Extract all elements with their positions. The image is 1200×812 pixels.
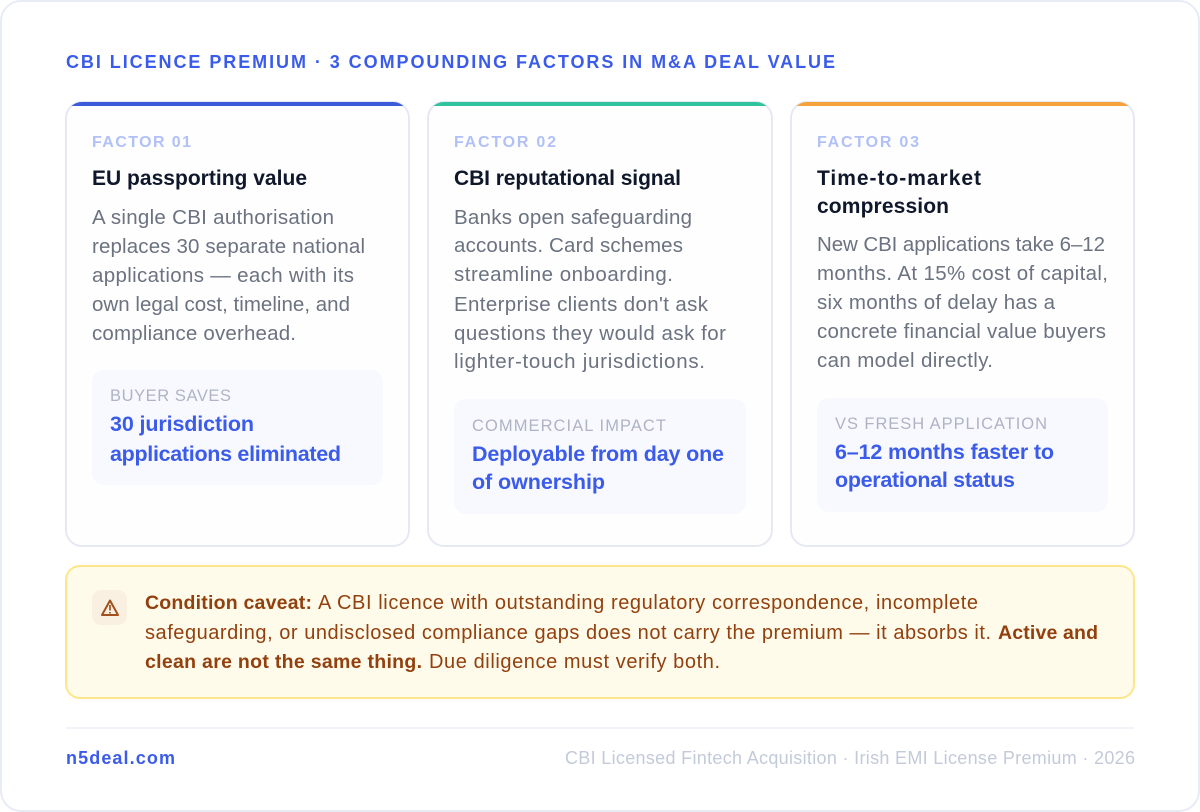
caveat text: clean are not the same thing. [145, 651, 422, 673]
callout: commercial impact: of ownership [472, 470, 605, 494]
callout: buyer saves: BUYER SAVES [110, 387, 231, 405]
factor label 02: FACTOR 02 [454, 134, 556, 151]
body text 03: concrete financial value buyers [817, 320, 1106, 343]
body text 03 [817, 233, 1108, 372]
body text 01: A single CBI authorisation [92, 206, 334, 229]
body text 03: New CBI applications take 6–12 [817, 233, 1105, 256]
body text 02: Enterprise clients don't ask [454, 293, 709, 316]
body text 02: Banks open safeguarding [454, 206, 692, 229]
factor label 01: FACTOR 01 [92, 134, 191, 151]
callout: vs fresh application: VS FRESH APPLICATION [835, 415, 1047, 433]
factor label 03: FACTOR 03 [817, 134, 919, 151]
caveat text: A CBI licence with outstanding regulatory correspondence, incomplete [318, 592, 978, 614]
body text 02: accounts. Card schemes [454, 234, 683, 257]
callout: buyer saves: applications eliminated [110, 442, 341, 466]
callout: buyer saves: 30 jurisdiction [110, 412, 254, 436]
caveat text: safeguarding, or undisclosed compliance gaps does not carry the premium — it absorbs it. [145, 622, 991, 644]
heading 03: compression [817, 195, 949, 218]
heading 02: CBI reputational signal [454, 167, 681, 190]
icon: warning triangle [92, 590, 127, 625]
callout: commercial impact: COMMERCIAL IMPACT [472, 417, 666, 435]
callout: commercial impact [454, 399, 746, 514]
heading 03: Time-to-market [817, 167, 981, 190]
panel: factor 02 [428, 102, 772, 546]
footer brand: n5deal.com [66, 748, 175, 768]
callout: vs fresh application [817, 398, 1108, 512]
body text 01: own legal cost, timeline, and [92, 293, 350, 316]
body text 02: questions they would ask for [454, 322, 726, 345]
caveat text: Active and [998, 622, 1098, 644]
callout: vs fresh application: operational status [835, 468, 1015, 492]
caveat text [145, 592, 1098, 673]
caveat text: Due diligence must verify both. [429, 651, 720, 673]
heading 03 [817, 167, 981, 218]
panel: condition caveat [66, 566, 1134, 698]
body text 01: compliance overhead. [92, 322, 296, 345]
footer note: CBI Licensed Fintech Acquisition · Irish EMI License Premium · 2026 [565, 748, 1135, 768]
accent bar: green [428, 102, 772, 106]
body text 02: lighter-touch jurisdictions. [454, 350, 705, 373]
body text 03: six months of delay has a [817, 291, 1056, 314]
body text 01: applications — each with its [92, 264, 354, 287]
panel: factor 03 [791, 102, 1134, 546]
callout: vs fresh application: 6–12 months faster to [835, 440, 1054, 464]
title: CBI LICENCE PREMIUM · 3 COMPOUNDING FACTORS IN M&A DEAL VALUE [66, 52, 835, 72]
caveat text: Condition caveat: [145, 592, 312, 614]
body text 02 [454, 206, 726, 373]
accent bar: orange [791, 102, 1134, 106]
callout: buyer saves [92, 370, 383, 485]
body text 01: replaces 30 separate national [92, 235, 365, 258]
callout: commercial impact: Deployable from day one [472, 442, 724, 466]
body text 03: can model directly. [817, 349, 993, 372]
body text 01 [92, 206, 365, 345]
body text 03: months. At 15% cost of capital, [817, 262, 1108, 285]
panel: factor 01 [66, 102, 409, 546]
body text 02: streamline onboarding. [454, 263, 673, 286]
accent bar: blue [66, 102, 409, 106]
heading 01: EU passporting value [92, 167, 307, 190]
